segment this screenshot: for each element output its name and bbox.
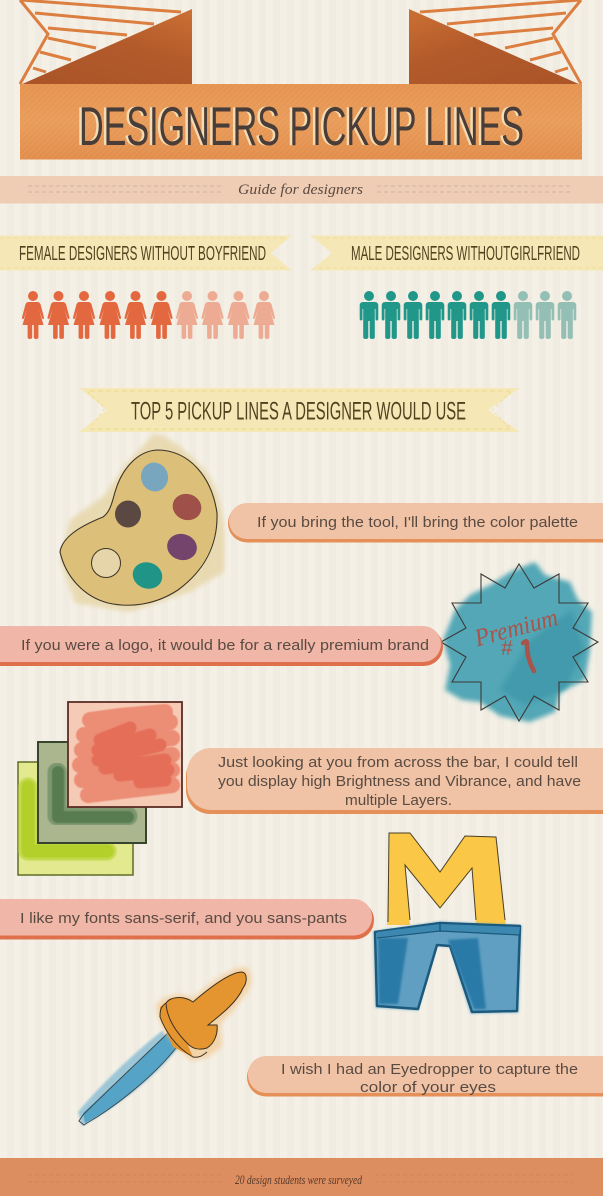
icon: premium #1 badge: Premium <box>471 604 561 653</box>
footer band <box>0 1158 603 1196</box>
right ribbon tail <box>409 0 581 85</box>
pictogram: male designers 7 of 10 <box>360 291 576 339</box>
header ribbon <box>20 0 582 160</box>
callout: brightness and layers line: Just looking at you from across the bar, I could tell <box>218 754 578 771</box>
subtitle band: Guide for designers <box>238 182 363 198</box>
pictogram: female designers 6 of 10 <box>22 291 275 339</box>
callout: logo line <box>0 626 443 666</box>
callout: eyedropper line <box>247 1056 603 1096</box>
letter M <box>387 833 506 925</box>
icon: eyedropper <box>78 967 251 1126</box>
callout: brightness and layers line: you display high Brightness and Vibrance, and have <box>218 773 581 790</box>
callout: color palette line <box>228 503 603 542</box>
callout: logo line: If you were a logo, it would be for a really premium brand <box>21 637 429 654</box>
yellow layer <box>18 762 133 875</box>
callout: eyedropper line: I wish I had an Eyedropper to capture the <box>281 1061 578 1078</box>
left ribbon tail <box>20 0 192 85</box>
banner: female designers <box>0 236 292 270</box>
section banner: top 5 <box>79 388 520 432</box>
icon: paint palette <box>60 433 225 612</box>
icon: letter M on jeans <box>373 833 522 1014</box>
main ribbon band <box>20 84 582 160</box>
icon: layered colour squares <box>18 702 182 875</box>
callout: color palette line: If you bring the tool, I'll bring the color palette <box>257 514 578 531</box>
subtitle band <box>0 176 603 204</box>
jeans <box>373 921 522 1014</box>
callout: brightness and layers line: multiple Layers. <box>345 792 452 809</box>
callout: sans-serif line <box>0 899 374 940</box>
callout: brightness and layers line <box>186 748 603 814</box>
banner: female designers: FEMALE DESIGNERS WITHOUT BOYFRIEND <box>19 243 266 265</box>
icon: premium #1 badge: # <box>501 637 513 660</box>
callout: eyedropper line: color of your eyes <box>360 1079 496 1096</box>
callout: sans-serif line: I like my fonts sans-serif, and you sans-pants <box>20 910 347 927</box>
footer band: 20 design students were surveyed <box>235 1172 362 1187</box>
icon: premium #1 badge <box>441 562 598 722</box>
green layer <box>38 742 146 843</box>
banner: male designers <box>310 236 603 270</box>
red layer <box>68 702 182 807</box>
